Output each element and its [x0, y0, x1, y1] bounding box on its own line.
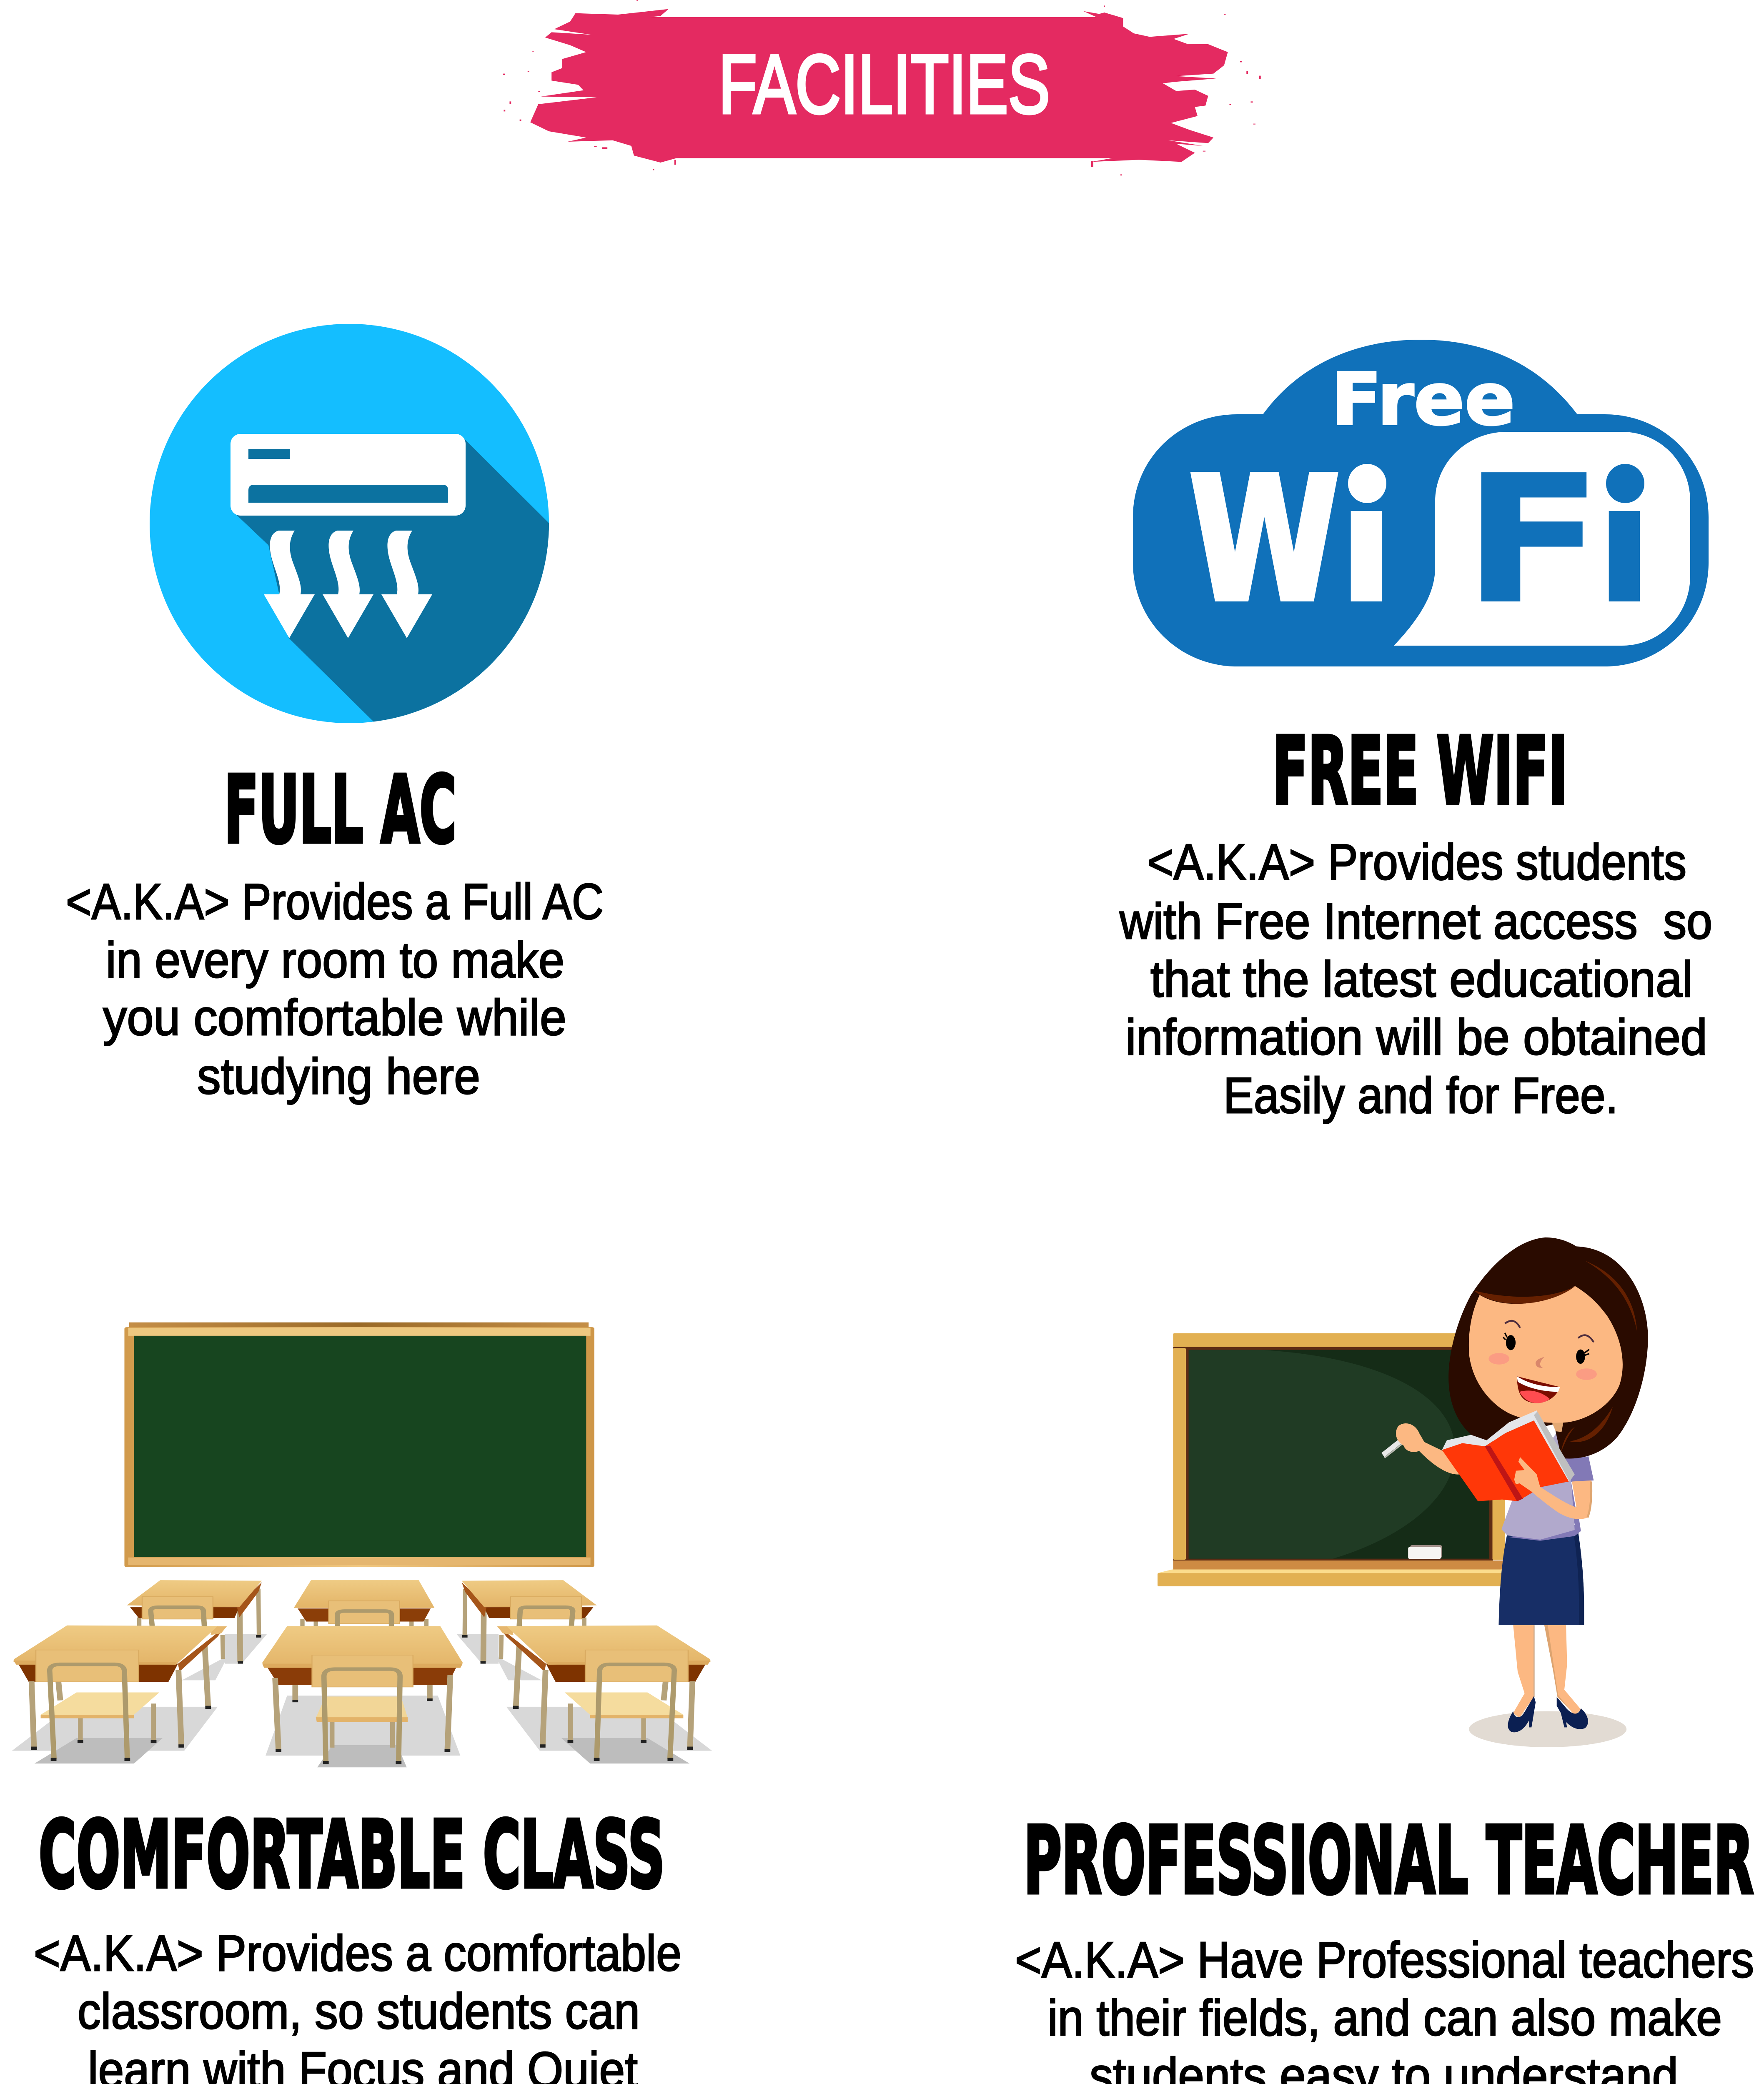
icon: free wifi logo: F [1462, 438, 1604, 644]
panel: comfortable class [12, 1323, 712, 2084]
description: full ac: <A.K.A> Provides a Full AC [66, 873, 604, 930]
illustration: classroom [12, 1323, 712, 1767]
description: professional teacher [1015, 1931, 1754, 2084]
description: full ac [66, 873, 604, 1105]
description: free wifi: with Free Internet access so [1119, 893, 1712, 949]
description: full ac: in every room to make [106, 932, 564, 988]
description: comfortable class: classroom, so students can [78, 1983, 640, 2039]
title text: FACILITIES [719, 38, 1050, 131]
illustration: teacher at chalkboard [1158, 1237, 1648, 1747]
icon: free wifi logo: W [1189, 441, 1340, 639]
heading: comfortable class: COMFORTABLE CLASS [39, 1801, 665, 1909]
panel: full ac [66, 324, 604, 1105]
desks, front left and right [12, 1626, 712, 1763]
teacher figure [1396, 1237, 1648, 1747]
chalkboard [1158, 1333, 1506, 1586]
brush stroke background [503, 0, 1261, 175]
icon: free wifi logo [1133, 340, 1709, 666]
description: free wifi: information will be obtained [1125, 1009, 1707, 1065]
desk, front centre [262, 1626, 463, 1767]
description: comfortable class: <A.K.A> Provides a comfortable [34, 1925, 682, 1981]
description: full ac: you comfortable while [103, 989, 566, 1046]
description: free wifi [1119, 834, 1712, 1124]
heading: full ac: FULL AC [224, 756, 456, 864]
hand with chalk [1396, 1423, 1460, 1475]
icon: free wifi logo: i [1336, 438, 1397, 644]
icon: free wifi logo: Free [1331, 357, 1515, 441]
panel: professional teacher [1015, 1237, 1754, 2084]
icon: free wifi logo: i [1594, 438, 1655, 644]
description: comfortable class [34, 1925, 682, 2084]
banner: facilities title [503, 0, 1261, 175]
desks, back row [127, 1580, 597, 1680]
description: free wifi: <A.K.A> Provides students [1147, 834, 1686, 890]
description: free wifi: Easily and for Free. [1223, 1067, 1618, 1124]
icon: air conditioner [150, 324, 554, 725]
description: free wifi: that the latest educational [1150, 951, 1693, 1007]
description: full ac: studying here [197, 1048, 480, 1105]
open book [1442, 1410, 1575, 1501]
panel: free wifi [1119, 340, 1712, 1124]
chalkboard [124, 1323, 594, 1567]
